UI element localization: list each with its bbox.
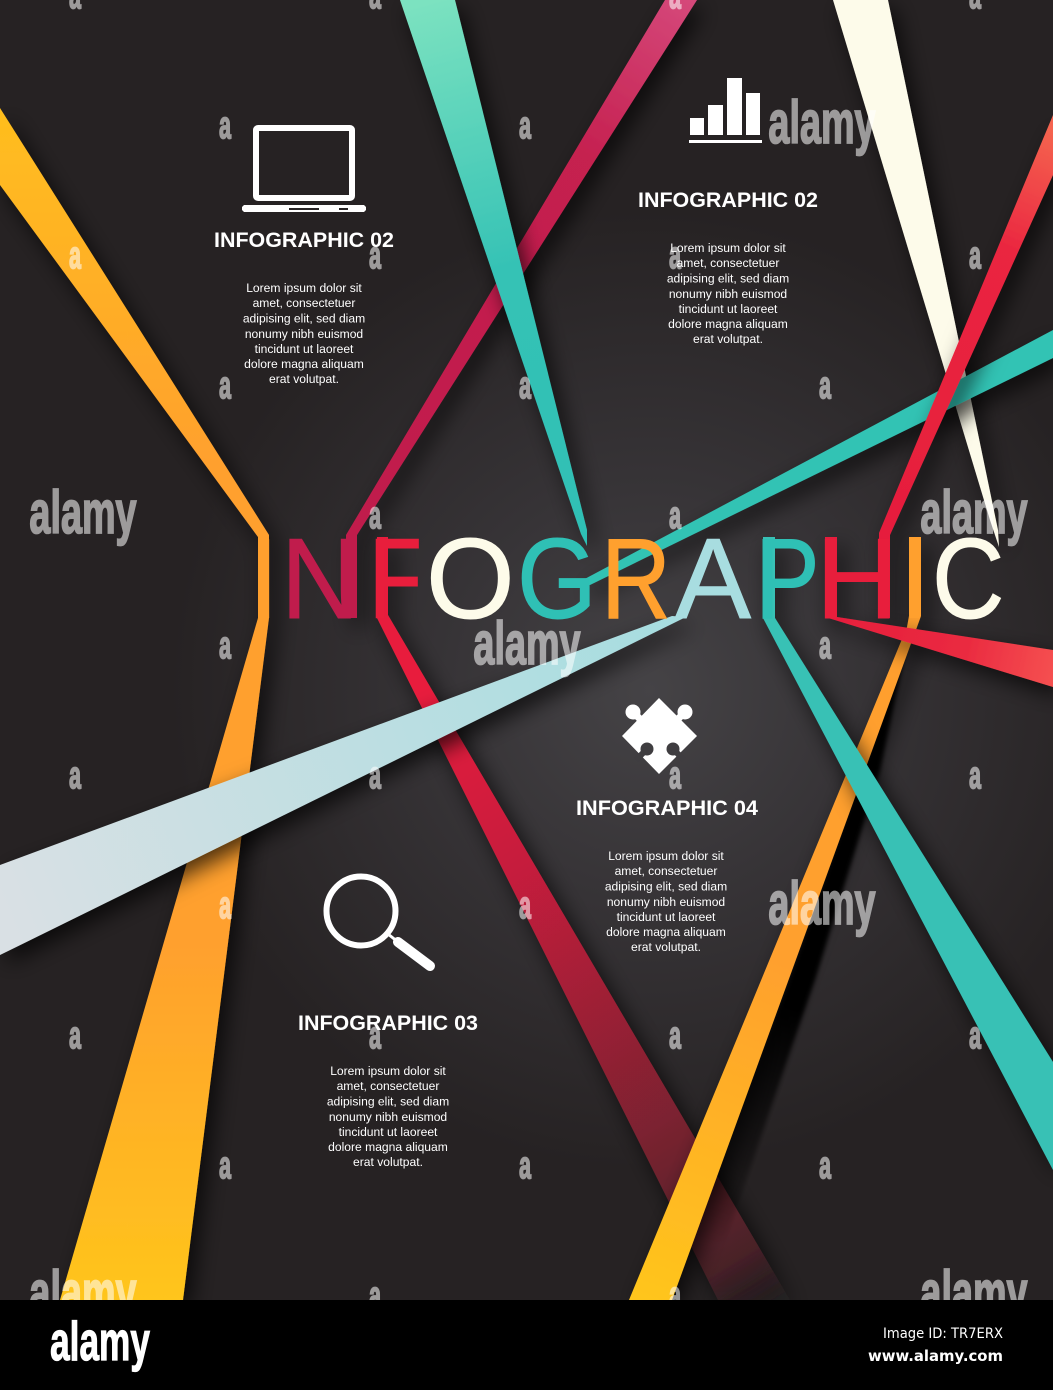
text block: Lorem ipsum dolor sit [608,849,724,863]
title: O [426,516,515,643]
text block: Lorem ipsum dolor sit [330,1064,446,1078]
ribbon: teal to G bar [579,330,1053,585]
icon: bar chart [689,78,762,143]
panel: laptop [214,128,394,386]
footer logo: alamy [50,1310,150,1372]
title [248,514,1004,643]
text block: amet, consectetuer [615,864,717,878]
text block: adipising elit, sed diam [605,880,727,894]
panel: bar chart [638,78,818,346]
watermarks: a [669,1273,682,1317]
watermarks: a [369,1013,382,1057]
text block: nonumy nibh euismod [669,287,787,301]
text block: Lorem ipsum dolor sit [246,281,362,295]
watermarks: a [219,883,232,927]
watermarks: alamy [29,1259,137,1326]
watermarks: alamy [768,89,876,156]
panel: magnifier [298,876,478,1169]
icon: puzzle piece [622,698,697,774]
watermarks: a [969,1013,982,1057]
text block: nonumy nibh euismod [607,895,725,909]
watermarks: a [969,753,982,797]
text block: nonumy nibh euismod [329,1110,447,1124]
watermarks: alamy [29,479,137,546]
ribbon: light blue from A [0,616,686,955]
text block: amet, consectetuer [253,296,355,310]
watermarks: alamy [920,479,1028,546]
watermarks: a [369,493,382,537]
watermarks: a [819,1143,832,1187]
title: A [675,516,751,643]
heading: INFOGRAPHIC 04 [576,797,758,820]
icon: magnifier [326,876,430,966]
heading: INFOGRAPHIC 02 [214,229,394,252]
watermarks: a [219,1143,232,1187]
title: P [755,516,820,643]
watermarks: a [519,883,532,927]
watermarks: alamy [473,610,581,677]
text block: erat volutpat. [269,372,339,386]
ribbon: cream to C [833,0,999,547]
ribbon: teal to G [400,0,587,546]
watermarks: a [69,233,82,277]
ribbon: orange from I [629,537,921,1300]
text block: amet, consectetuer [677,256,779,270]
text block: tincidunt ut laoreet [679,302,778,316]
ribbon: red from H [825,537,1053,687]
title: N [281,514,359,643]
ribbon: red from F [377,537,790,1300]
ribbon: orange to I [0,108,269,1300]
text block: tincidunt ut laoreet [255,342,354,356]
watermarks: a [369,1273,382,1317]
watermarks: alamy [768,870,876,937]
watermarks: a [69,753,82,797]
ribbon: crimson to N [346,0,697,618]
watermarks: a [969,233,982,277]
title: C [932,515,1004,642]
watermarks: a [819,623,832,667]
text block: erat volutpat. [693,332,763,346]
text block: dolore magna aliquam [328,1140,448,1154]
watermarks: a [669,233,682,277]
ribbon: teal from P [763,537,1053,1170]
text block: tincidunt ut laoreet [617,910,716,924]
title: I [899,516,931,643]
watermarks: a [219,623,232,667]
text block: dolore magna aliquam [668,317,788,331]
text block: erat volutpat. [353,1155,423,1169]
ribbon: red to H [879,115,1053,618]
image id: Image ID: TR7ERX [883,1326,1003,1342]
footer bar [0,1300,1053,1390]
text block: Lorem ipsum dolor sit [670,241,786,255]
panel: puzzle [576,698,758,954]
website: www.alamy.com [868,1347,1003,1365]
watermarks: alamy [920,1259,1028,1326]
text block: dolore magna aliquam [244,357,364,371]
text block: tincidunt ut laoreet [339,1125,438,1139]
watermarks: a [69,1013,82,1057]
title: G [517,515,597,642]
text block: adipising elit, sed diam [667,272,789,286]
text block: adipising elit, sed diam [327,1094,449,1108]
watermarks: a [519,103,532,147]
title: I [248,516,280,643]
watermarks: a [669,753,682,797]
title: F [369,516,422,643]
title: R [601,516,671,643]
black shadow wedge beside orange ribbon [680,640,908,1260]
heading: INFOGRAPHIC 03 [298,1012,478,1035]
watermarks: a [219,103,232,147]
watermarks: a [369,753,382,797]
title: H [816,516,898,643]
icon: laptop [242,128,366,212]
watermarks: a [669,1013,682,1057]
watermarks: a [519,1143,532,1187]
text block: amet, consectetuer [337,1079,439,1093]
watermarks: a [369,233,382,277]
watermarks: a [519,363,532,407]
text block: adipising elit, sed diam [243,312,365,326]
text block: erat volutpat. [631,940,701,954]
watermarks: a [669,493,682,537]
watermarks: a [819,363,832,407]
text block: dolore magna aliquam [606,925,726,939]
text block: nonumy nibh euismod [245,327,363,341]
heading: INFOGRAPHIC 02 [638,189,818,212]
watermarks: a [219,363,232,407]
